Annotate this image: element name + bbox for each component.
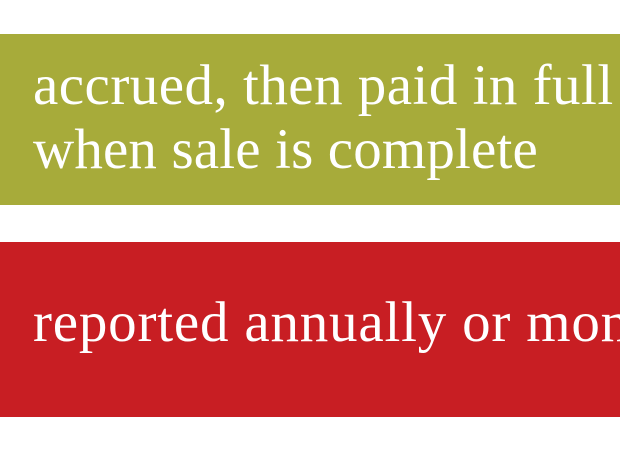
text: accrued description: accrued, then paid in full bbox=[33, 54, 614, 117]
panel: reported, red band bbox=[0, 242, 620, 417]
text: accrued description: when sale is complete bbox=[33, 118, 538, 181]
text: accrued description bbox=[33, 54, 614, 181]
panel: accrued, olive band bbox=[0, 34, 620, 205]
